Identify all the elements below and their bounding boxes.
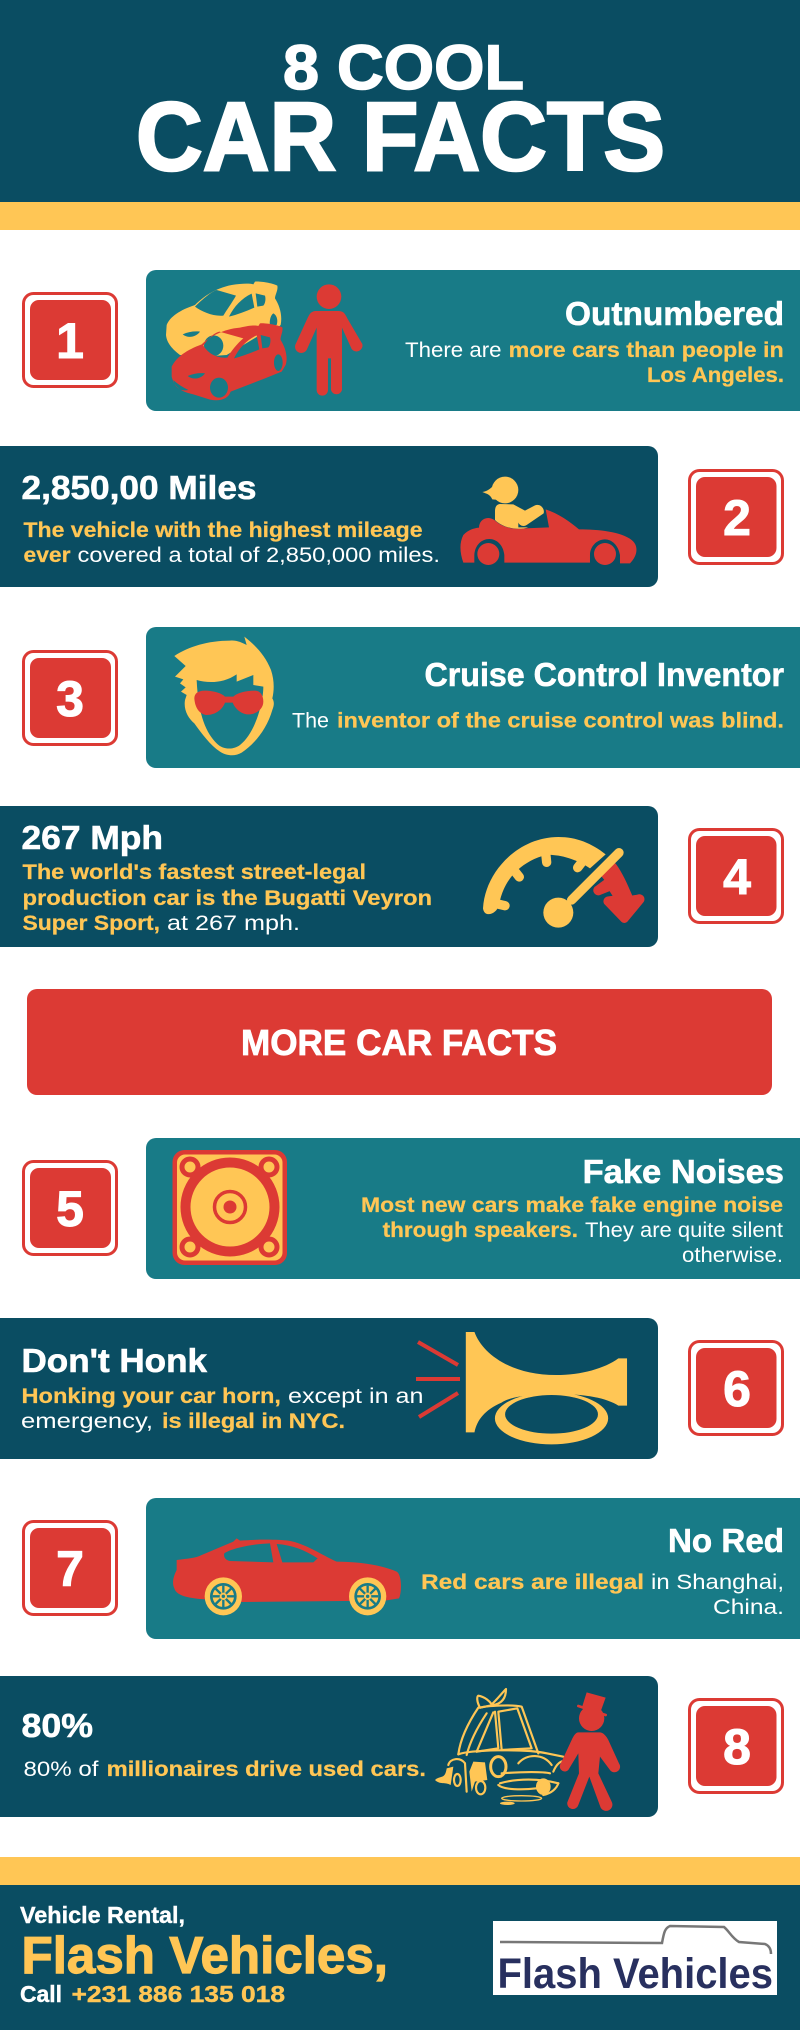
description: covered a total of 2,850,000 miles. [78, 544, 440, 567]
heading: Outnumbered [565, 295, 784, 332]
description: is illegal in NYC. [162, 1410, 345, 1433]
panel: fact 4 speed [0, 806, 782, 947]
icon: red sedan [173, 1538, 401, 1615]
panel: fact 8 millionaires [0, 1676, 782, 1817]
description: otherwise. [682, 1244, 783, 1267]
footer text: contact [20, 1902, 388, 2007]
heading: Don't Honk [22, 1342, 208, 1379]
heading: 80% [22, 1707, 93, 1744]
footer text: contact: Call [20, 1981, 62, 2007]
icon: rear wheel [349, 1577, 386, 1615]
icon: man with red glasses [174, 637, 274, 755]
description: more cars than people in [509, 339, 784, 362]
description: through speakers. [383, 1219, 578, 1242]
icon: driver in red convertible [460, 477, 636, 565]
banner: more car facts [27, 989, 772, 1095]
badge 6: 6 [723, 1361, 751, 1417]
heading: 267 Mph [22, 819, 163, 856]
panel: fact 6 don't honk [0, 1318, 782, 1459]
description: except in an [288, 1385, 424, 1408]
heading: No Red [668, 1522, 784, 1559]
badge 1: 1 [56, 313, 84, 369]
heading: Fake Noises [583, 1153, 784, 1190]
heading: Cruise Control Inventor [424, 656, 784, 693]
description: 80% of [24, 1758, 99, 1781]
panel: fact 5 fake noises [24, 1138, 800, 1279]
badge 1 [24, 294, 116, 386]
heading: 2,850,00 Miles [22, 469, 256, 506]
panel: fact 7 no red [24, 1498, 800, 1639]
description: Most new cars make fake engine noise [361, 1194, 783, 1217]
description: at 267 mph. [167, 912, 300, 935]
title: 8 COOL [283, 33, 524, 103]
description: The [292, 710, 329, 732]
badge 6 [690, 1342, 782, 1434]
description: China. [713, 1596, 784, 1619]
badge 8: 8 [723, 1719, 751, 1775]
badge 4 [690, 830, 782, 922]
banner: more car facts: MORE CAR FACTS [241, 1022, 557, 1063]
description: Honking your car horn, [22, 1385, 281, 1408]
description [361, 1194, 783, 1267]
badge 7: 7 [56, 1541, 84, 1597]
icon: speedometer [483, 837, 643, 928]
icon: front wheel [205, 1577, 242, 1615]
badge 3: 3 [56, 671, 84, 727]
description: millionaires drive used cars. [107, 1758, 426, 1781]
description: The vehicle with the highest mileage [24, 519, 422, 542]
badge 2: 2 [723, 490, 751, 546]
description [22, 861, 432, 935]
footer [0, 1857, 800, 2030]
footer text: contact: +231 886 135 018 [72, 1981, 285, 2007]
icon: speaker [172, 1150, 287, 1265]
description: They are quite silent [585, 1219, 783, 1242]
icon: horn [416, 1332, 627, 1444]
description [421, 1571, 784, 1619]
icon: wrecked car and millionaire [435, 1689, 620, 1811]
title [136, 33, 665, 191]
panel: fact 3 cruise control [24, 627, 800, 768]
description: Red cars are illegal [421, 1571, 644, 1594]
description: Super Sport, [22, 912, 160, 935]
description: production car is the Bugatti Veyron [22, 887, 432, 910]
badge 5: 5 [56, 1181, 84, 1237]
description [24, 519, 440, 567]
description: Los Angeles. [647, 364, 784, 387]
description: in Shanghai, [651, 1571, 784, 1594]
badge 2 [690, 470, 782, 564]
title: CAR FACTS [136, 82, 665, 191]
badge 5 [24, 1162, 116, 1254]
badge 8 [690, 1700, 782, 1792]
description: The world's fastest street-legal [22, 861, 366, 884]
panel: fact 2 mileage [0, 446, 782, 587]
logo: Flash Vehicles: Flash Vehicles [498, 1950, 773, 1998]
logo: Flash Vehicles [493, 1921, 777, 1998]
description: ever [24, 544, 70, 567]
description: inventor of the cruise control was blind. [337, 710, 784, 732]
header band [0, 0, 800, 230]
badge 4: 4 [723, 849, 751, 905]
description: emergency, [21, 1410, 153, 1433]
panel: fact 1 outnumbered [24, 270, 800, 411]
badge 7 [24, 1522, 116, 1614]
description [405, 339, 784, 387]
badge 3 [24, 652, 116, 744]
footer text: contact: Vehicle Rental, [20, 1902, 185, 1928]
footer text: contact: Flash Vehicles, [22, 1927, 388, 1985]
icon: two cars and a person [166, 282, 362, 400]
description [21, 1385, 424, 1433]
description: There are [405, 339, 502, 362]
